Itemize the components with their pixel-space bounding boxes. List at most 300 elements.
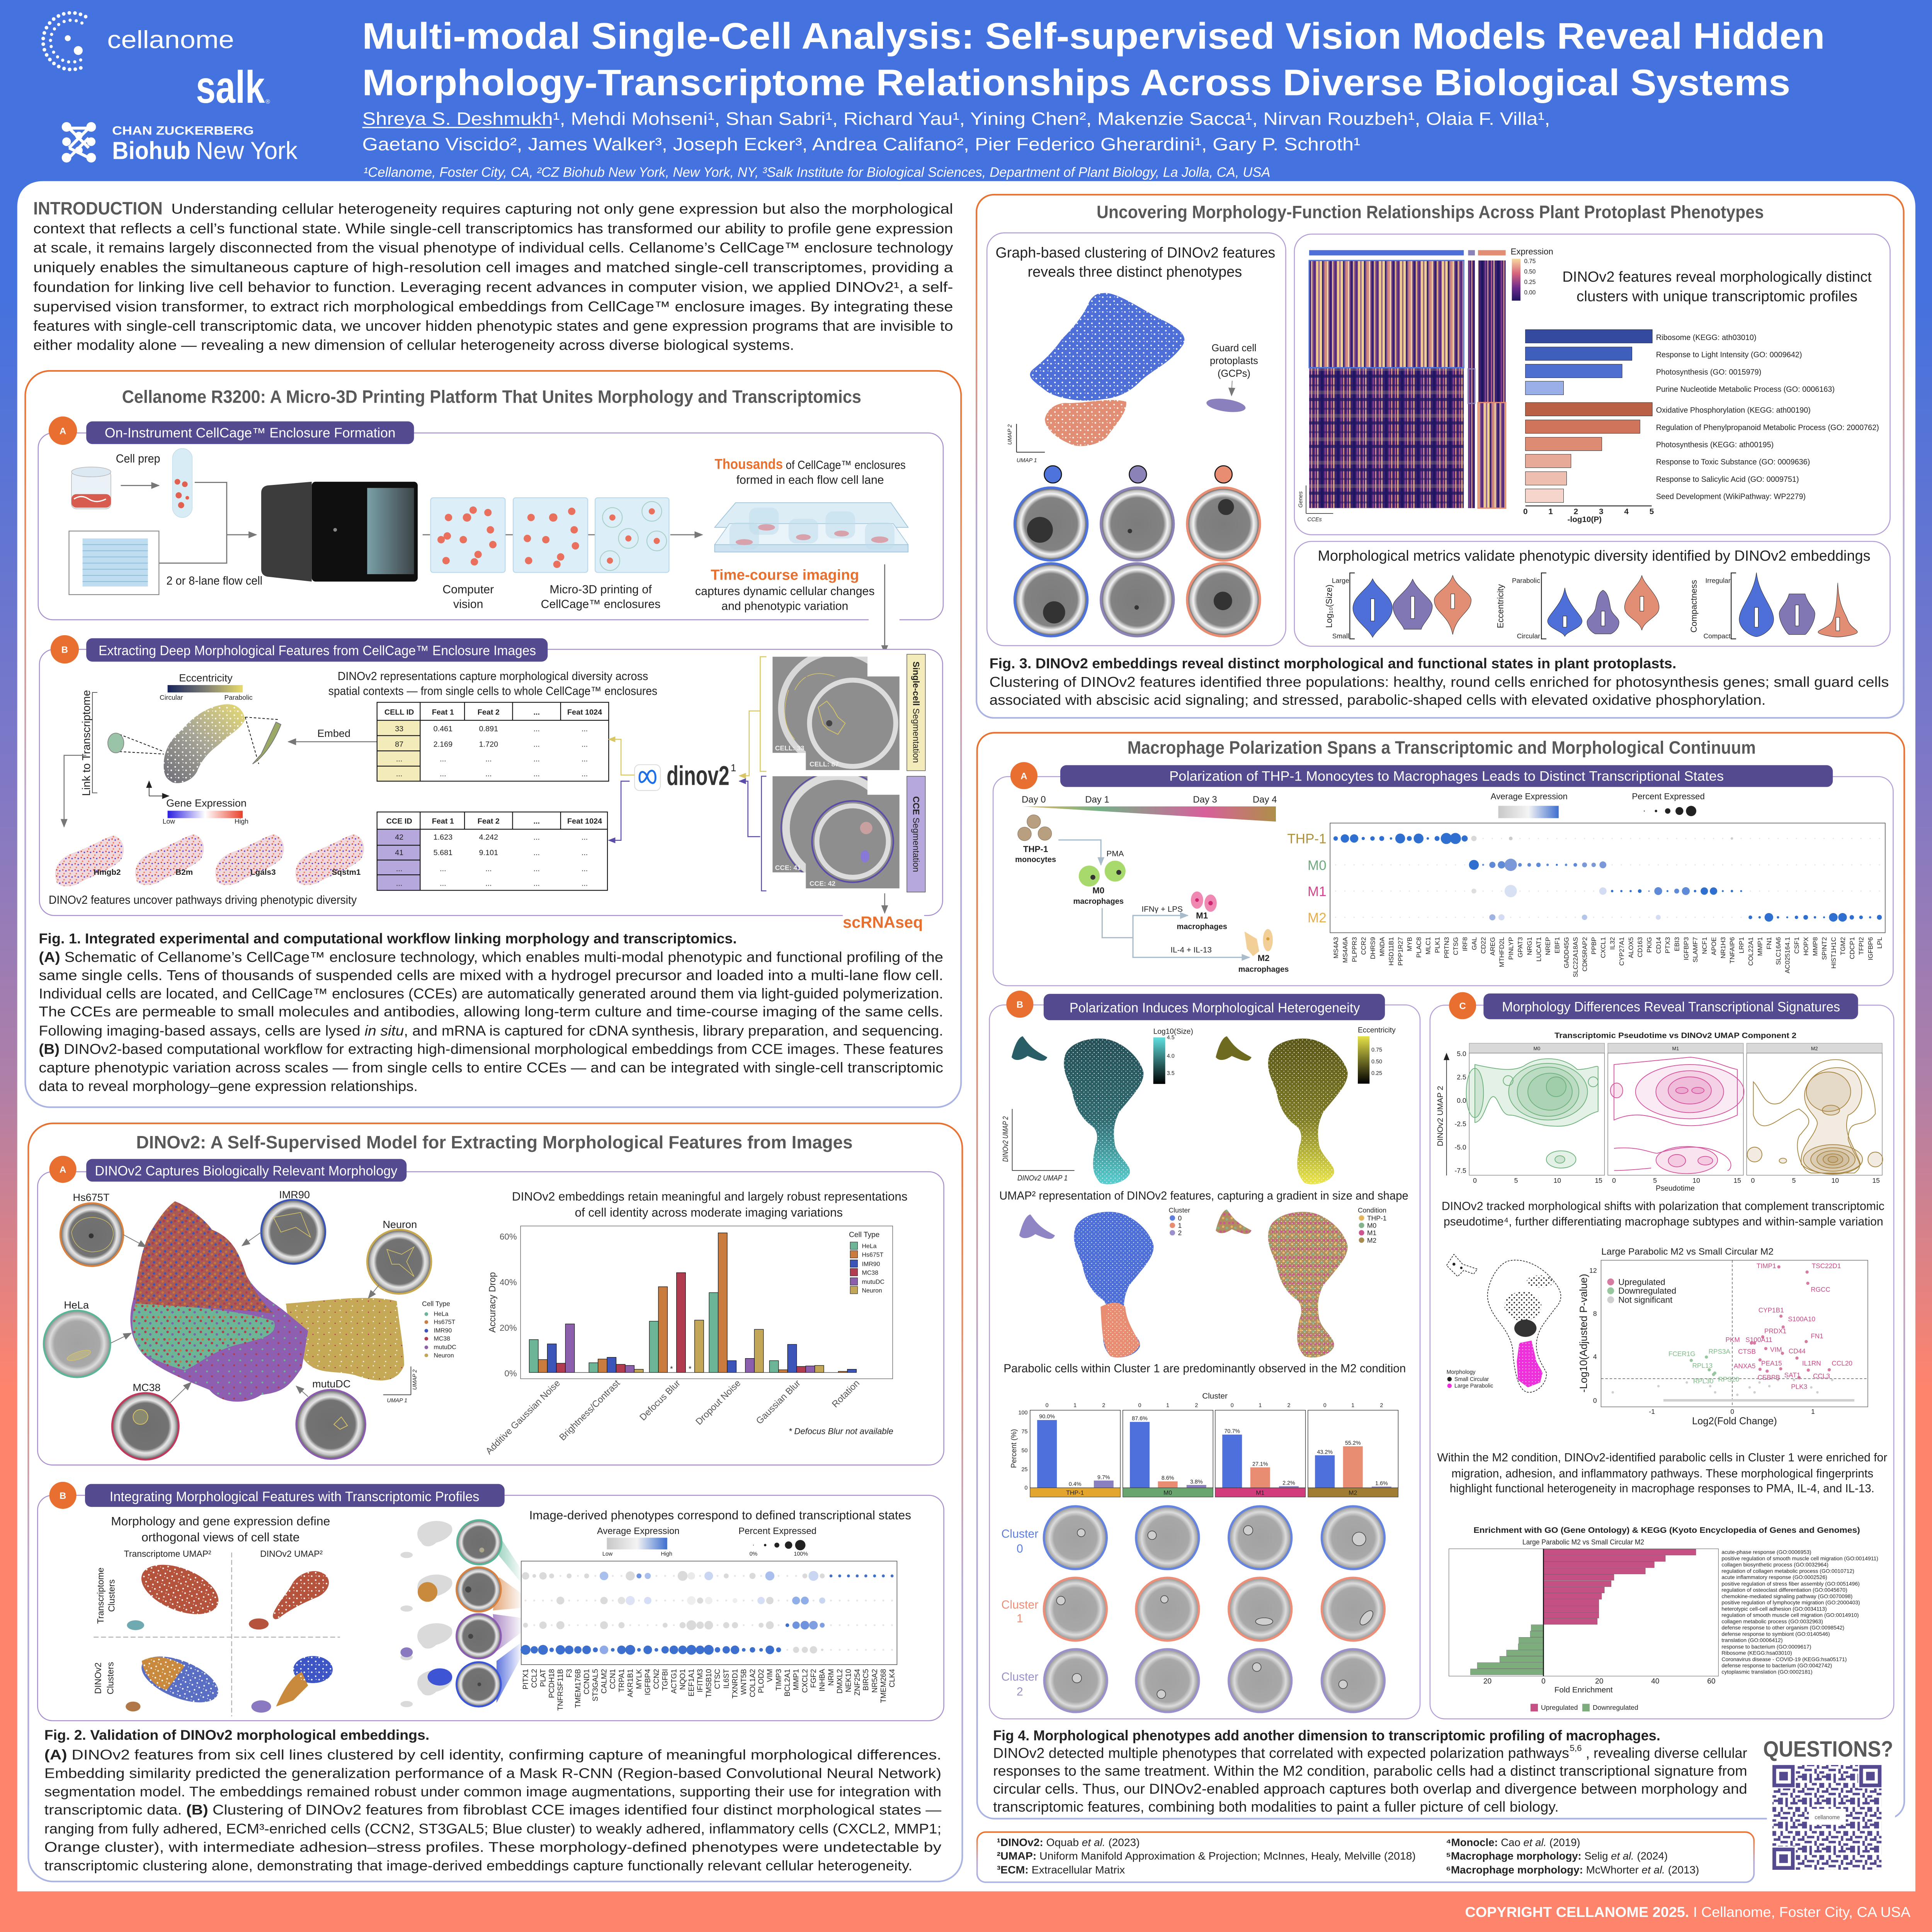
volcano plot: TIMP1 <box>1757 1262 1776 1270</box>
bar chart: enrichment: 3 <box>1599 507 1604 516</box>
density chart: pseudotime: M1 <box>1672 1046 1679 1051</box>
heading: bar chart <box>512 1189 908 1219</box>
annotation bars <box>1309 250 1506 255</box>
dot plot: polarization genes: HSD11B1 <box>1388 937 1395 966</box>
violins: eccentricity: Circular <box>1517 632 1540 640</box>
dot plot: fibroblast genes <box>520 1561 897 1711</box>
volcano plot: Not significant <box>1618 1295 1673 1304</box>
volcano plot: S100A10 <box>1788 1315 1815 1323</box>
dot plot: polarization genes: AC025164.1 <box>1784 937 1791 973</box>
volcano plot: 4 <box>1593 1353 1597 1361</box>
text: thousands <box>714 456 906 486</box>
bar chart: enrichment: Photosynthesis (GO: 0015979) <box>1656 367 1761 376</box>
dot plot: polarization genes: MS4A6A <box>1342 937 1349 963</box>
subpanel: heatmap and enrichment <box>1294 234 1890 535</box>
connectors: dinov2 <box>609 657 766 891</box>
density chart: pseudotime: M2 <box>1811 1046 1818 1051</box>
badge C <box>1449 992 1476 1019</box>
icon: tube <box>172 449 192 517</box>
table: cell features: 87 <box>395 740 403 748</box>
bar chart: enrichment: -log10(P) <box>1567 515 1602 524</box>
title: Morphology-Transcriptome Relationships Across Diverse Biological Systems <box>362 62 1790 103</box>
dot plot: polarization genes: APOE <box>1710 937 1718 955</box>
logo: Chan Zuckerberg Biohub: CHAN ZUCKERBERG <box>112 124 254 138</box>
table: cell features: ... <box>440 770 446 778</box>
arrows: prep to instrument <box>121 482 885 653</box>
legend: expression: 0.00 <box>1524 289 1536 296</box>
volcano plot: FN1 <box>1811 1332 1823 1340</box>
density chart: pseudotime: 5 <box>1792 1177 1796 1184</box>
volcano plot: VIM <box>1770 1346 1782 1354</box>
legend: cluster <box>1169 1206 1190 1237</box>
caption: Fig 3: Clustering of DINOv2 features identified three populations: healthy, round cells enriched for photosynthesis genes; small guard cells <box>990 674 1889 690</box>
density chart: pseudotime: 15 <box>1872 1177 1880 1184</box>
text: treatments <box>1107 849 1212 954</box>
text: pseudotime: DINOv2 tracked morphological shifts with polarization that complement transcriptomic <box>1442 1200 1884 1213</box>
badge B <box>1006 991 1033 1018</box>
caption: Fig 2: Orange cluster), with intermediate adhesion–stress profiles. These morphology-defined phenotypes were undetectable by <box>44 1840 941 1855</box>
dot plot: fibroblast genes: VIM <box>766 1669 774 1682</box>
bar chart: accuracy drop: Accuracy Drop <box>487 1272 498 1333</box>
table: CCE features: ... <box>440 864 446 873</box>
introduction text: INTRODUCTION <box>33 198 163 218</box>
panel: references: ²UMAP: Uniform Manifold Approximation & Projection; McInnes, Healy, Melville (2018) <box>997 1850 1416 1862</box>
dot plot: fibroblast genes: CCL2 <box>531 1669 539 1688</box>
dot plot: polarization genes: THP-1 <box>1287 832 1327 847</box>
violins: compactness: Compact <box>1704 632 1731 640</box>
dot plot: polarization genes: CD22 <box>1480 937 1487 954</box>
chart: enrichment: 20 <box>1483 1677 1492 1685</box>
volcano plot: S100A11 <box>1745 1336 1772 1344</box>
legend: percent expressed: 100% <box>794 1551 808 1557</box>
legend: expression: 0.50 <box>1524 269 1536 275</box>
dot plot: fibroblast genes: FGF2 <box>810 1669 818 1688</box>
violins: compactness: Irregular <box>1705 577 1731 584</box>
images: single-cell segmentation <box>772 652 900 770</box>
legend: average expression <box>1491 792 1568 818</box>
bar chart: accuracy drop: Dropout Noise <box>694 1378 743 1427</box>
introduction text: at scale, it remains largely disconnected from the visual phenotype of individual cells. Cellanome’s CellCage™ enclosure technology <box>33 240 953 256</box>
legend: bar chart: Hs675T <box>862 1252 884 1259</box>
dinov2 logo <box>634 760 736 791</box>
dot plot: polarization genes: NREP <box>1544 937 1551 955</box>
icon: glass flow cell <box>714 503 908 552</box>
UMAP: morphology outline <box>1447 1254 1561 1392</box>
table: CCE features: 9.101 <box>479 849 498 857</box>
subpanel: clustering <box>987 233 1286 646</box>
dot plot: fibroblast genes: NRM <box>827 1669 835 1686</box>
labels: clusters: 0 <box>1017 1543 1023 1555</box>
dot plot: fibroblast genes: TMEM268 <box>879 1669 888 1703</box>
violins: size: Log₁₀(Size) <box>1324 585 1334 628</box>
bar chart: cluster percent <box>1010 1391 1398 1497</box>
image: HeLa: HeLa <box>64 1299 89 1311</box>
violins: eccentricity: Eccentricity <box>1495 584 1505 628</box>
logo: salk: salk <box>196 62 265 113</box>
legend: percent expressed: Percent Expressed <box>738 1526 816 1536</box>
legend: expression: 0.75 <box>1524 258 1536 265</box>
dot plot: fibroblast genes: WNT5B <box>740 1669 748 1695</box>
title: Multi-modal Single-Cell Analysis: Self-supervised Vision Models Reveal Hidden <box>362 15 1825 57</box>
UMAP: eccentricity <box>1216 1036 1348 1184</box>
panel heading: DINOv2: A Self-Supervised Model for Extracting Morphological Features from Images <box>136 1132 853 1152</box>
authors: Shreya S. Deshmukh¹, Mehdi Mohseni¹, Shan Sabri¹, Richard Yau¹, Yining Chen², Makenzie Sacca¹, Nirvan Rouzbeh¹, Olaia F. Villa¹, <box>362 109 1550 129</box>
label: scRNAseq: scRNAseq <box>843 913 923 931</box>
dot plot: fibroblast genes: BCL2A1 <box>784 1669 792 1696</box>
bar chart: enrichment: 1 <box>1548 507 1553 516</box>
volcano plot: CD44 <box>1789 1347 1806 1355</box>
heading: Morphological metrics validate phenotypic diversity identified by DINOv2 embeddings <box>1318 548 1871 564</box>
caption: Fig 1: data to reveal morphology–gene expression relationships. <box>39 1078 418 1094</box>
dot plot: fibroblast genes: TMEM176B <box>574 1669 582 1708</box>
text: treatments: IL-4 + IL-13 <box>1170 946 1212 954</box>
label: single-cell segmentation <box>907 654 925 771</box>
bar chart: accuracy drop: 40% <box>500 1277 517 1287</box>
axes: heatmap: Genes <box>1298 492 1304 508</box>
axes: DINOv2 UMAP 1 <box>1017 1174 1068 1182</box>
subpanel B: morphological heterogeneity <box>990 991 1420 1719</box>
dot plot: polarization genes <box>1287 823 1885 977</box>
badge B: B <box>1017 1000 1023 1010</box>
dot plot: polarization genes: MMP8 <box>1811 937 1819 956</box>
dinov2 logo: 1 <box>731 763 736 774</box>
text: M2 condition: Within the M2 condition, DINOv2-identified parabolic cells in Cluster 1 were enriched for <box>1437 1451 1887 1464</box>
chart: enrichment: translation (GO:0006412) <box>1721 1637 1783 1643</box>
caption: Fig 4 <box>993 1728 1747 1815</box>
text: time-course imaging: and phenotypic variation <box>721 600 848 612</box>
introduction text: features with single-cell transcriptomic data, we uncover hidden phenotypic states and gene expression programs that are invisible to <box>33 318 953 334</box>
chart: enrichment: 0 <box>1541 1677 1546 1685</box>
table: cell features: ... <box>485 755 492 764</box>
table: cell features: 0.461 <box>434 725 452 733</box>
introduction text: Understanding cellular heterogeneity requires capturing not only gene expression but also the morphological <box>171 201 953 217</box>
introduction text: supervised vision transformer, to extract rich morphological embeddings from CellCage™ enclosure images. By integrating these <box>33 298 953 315</box>
chart: enrichment: regulation of osteoclast differentiation (GO:0045670) <box>1721 1587 1847 1593</box>
bar chart: cluster percent: 9.7% <box>1097 1475 1110 1481</box>
bar chart: cluster percent: 87.6% <box>1132 1416 1148 1422</box>
dot plot: polarization genes: M1 <box>1308 884 1327 899</box>
bar chart: cluster percent: 2 <box>1195 1403 1198 1409</box>
dot plot: fibroblast genes: CCND1 <box>583 1669 591 1694</box>
legend: UMAP cell type: Cell Type <box>422 1300 450 1308</box>
subpanel B: morphological heterogeneity: Polarization Induces Morphological Heterogeneity <box>1070 1000 1360 1015</box>
bar chart: cluster percent: 1 <box>1259 1403 1262 1409</box>
dot plot: polarization genes: CD163 <box>1636 937 1644 957</box>
bar chart: enrichment: Purine Nucleotide Metabolic Process (GO: 0006163) <box>1656 385 1835 394</box>
chart: enrichment: positive regulation of stress fiber assembly (GO:0051496) <box>1721 1580 1860 1587</box>
bar chart: cluster percent: THP-1 <box>1066 1490 1084 1497</box>
legend: cluster: 2 <box>1178 1229 1182 1237</box>
volcano plot: RPL30 <box>1693 1377 1713 1385</box>
bar chart: cluster percent: 43.2% <box>1317 1449 1333 1455</box>
caption: Fig 2: ranging from fully adhered, ECM³-enriched cells (CCN2, ST3GAL5; Blue cluster) to weakly adhered, inflammatory cells (CXCL2, MMP1; <box>44 1821 941 1837</box>
dot plot: polarization genes: PINLYP <box>1507 937 1515 960</box>
dot plot: polarization genes: M0 <box>1308 858 1327 873</box>
panel heading: Cellanome R3200: A Micro-3D Printing Platform That Unites Morphology and Transcriptomics <box>122 387 861 407</box>
facet: M2 <box>1747 1060 1883 1174</box>
caption: Fig 1: The CCEs are permeable to small molecules and antibodies, allowing long-term culture and time-course imaging of the same cells. <box>39 1004 943 1020</box>
legend: percent expressed <box>738 1526 816 1557</box>
logo: Chan Zuckerberg Biohub: New York <box>196 136 298 164</box>
image: Hs675T <box>60 1191 123 1266</box>
introduction text <box>33 198 953 353</box>
text: M2 condition <box>1437 1451 1887 1495</box>
caption: Fig 3 <box>990 655 1889 708</box>
timeline <box>1022 794 1277 821</box>
dot plot: polarization genes: GAL <box>1471 937 1478 950</box>
header logos <box>43 13 298 164</box>
chart: enrichment: defense response to symbiont (GO:0140546) <box>1721 1631 1830 1637</box>
legend: size: 3.5 <box>1167 1070 1175 1077</box>
legend: gene expression: Low <box>163 818 175 825</box>
table: cell features: ... <box>533 755 540 764</box>
subpanel C: transcriptional signatures <box>1430 992 1894 1719</box>
violins: size: Large <box>1332 577 1349 584</box>
density chart: pseudotime: 5 <box>1653 1177 1657 1184</box>
caption: Fig 2: Embedding similarity predicted the generalization performance of a Mask R-CNN (Region-based Convolutional Neural Network) <box>44 1765 941 1781</box>
dot plot: fibroblast genes: NQO1 <box>679 1669 687 1690</box>
dot plot: polarization genes: IL32 <box>1609 937 1616 950</box>
QR code: cellanome <box>1815 1815 1840 1821</box>
legend: eccentricity: 0.50 <box>1371 1059 1382 1065</box>
table: cell features: Feat 1024 <box>567 708 602 716</box>
table: CCE features: CCE ID <box>386 817 412 826</box>
image: Neuron <box>367 1218 431 1294</box>
legend: morphology <box>1447 1369 1493 1389</box>
label: CCE segmentation: CCE Segmentation <box>911 796 921 872</box>
bar chart: cluster percent: 2 <box>1287 1403 1290 1409</box>
legend: percent expressed: 0% <box>750 1551 758 1557</box>
labels: clusters <box>1001 1528 1038 1698</box>
images: single-cell segmentation: CELL: 87 <box>810 760 839 768</box>
density chart: pseudotime: 0 <box>1473 1177 1477 1184</box>
dot plot: polarization genes: ALOX5 <box>1627 937 1634 958</box>
caption: Fig 2: transcriptomic data. (B) Clustering of DINOv2 features from fibroblast CCE images identified four distinct morphological states — <box>44 1802 942 1818</box>
caption: Fig 1: (B) DINOv2-based computational workflow for extracting high-dimensional morphological embeddings from CCE images. These features <box>39 1041 943 1057</box>
dot plot: polarization genes: PPP1R27 <box>1397 937 1404 966</box>
dot plot: fibroblast genes: PLAT <box>539 1669 548 1687</box>
dot plot: fibroblast genes: DMXL2 <box>836 1669 844 1694</box>
volcano plot: TSC22D1 <box>1812 1262 1841 1270</box>
legend: UMAP cell type: MC38 <box>434 1335 450 1342</box>
violins: compactness: Compactness <box>1689 580 1699 633</box>
caption: Fig 1: Fig. 1. Integrated experimental and computational workflow linking morphology and transcriptomics. <box>39 931 737 947</box>
table: cell features: 33 <box>395 725 403 733</box>
table: CCE features: ... <box>582 833 588 842</box>
UMAP grid <box>126 1555 333 1713</box>
images: plant cells <box>1015 488 1260 636</box>
density chart: pseudotime: 0 <box>1612 1177 1616 1184</box>
heading: bar chart: of cell identity across moderate imaging variations <box>575 1206 843 1219</box>
arrow: embed: Embed <box>317 727 350 739</box>
labels: UMAP grid: DINOv2 <box>93 1662 103 1694</box>
caption: Fig 4: Fig 4. Morphological phenotypes add another dimension to transcriptomic profiling of macrophages. <box>993 1728 1660 1743</box>
dot plot: fibroblast genes: MMP1 <box>793 1669 801 1690</box>
arrow: to scRNAseq <box>884 893 885 913</box>
subpanel B: deep features: Extracting Deep Morphological Features from CellCage™ Enclosure Images <box>99 643 536 658</box>
bar chart: accuracy drop: 0% <box>504 1369 517 1378</box>
chart: enrichment: Fold Enrichment <box>1554 1685 1613 1694</box>
dot plot: polarization genes: CYP27A1 <box>1618 937 1625 966</box>
panel heading: Uncovering Morphology-Function Relationships Across Plant Protoplast Phenotypes <box>1097 202 1764 222</box>
dot plot: fibroblast genes: CTSC <box>714 1669 722 1689</box>
caption: Fig 1: (A) Schematic of Cellanome’s CellCage™ enclosure technology, which enables multi-modal phenotypic and functional profiling of the <box>39 949 943 965</box>
legend dots <box>1044 466 1232 483</box>
text: pseudotime <box>1442 1200 1884 1228</box>
UMAPs: gene expression: Lgals3 <box>250 868 276 877</box>
axes <box>1007 424 1045 464</box>
bar chart: accuracy drop: 20% <box>500 1323 517 1333</box>
volcano plot: Downregulated <box>1618 1286 1676 1296</box>
image panels: cells <box>430 498 669 573</box>
legend: average expression: High <box>661 1551 672 1557</box>
dot plot: fibroblast genes: NR5A2 <box>871 1669 879 1693</box>
table: CCE features: Feat 2 <box>478 817 500 826</box>
UMAP: condition <box>1216 1209 1348 1357</box>
mini UMAPs <box>400 1521 452 1707</box>
bar chart: cluster percent: 90.0% <box>1039 1413 1055 1420</box>
density chart: pseudotime: 10 <box>1554 1177 1561 1184</box>
callouts: cell zoom <box>108 717 281 764</box>
bar chart: cluster percent: 0 <box>1046 1403 1049 1409</box>
label: guard cells: (GCPs) <box>1218 368 1250 379</box>
badge B <box>51 635 79 663</box>
caption: Fig 4: responses to the same treatment. Within the M2 condition, parabolic cells had a distinct transcriptional signature from <box>993 1763 1747 1779</box>
caption: Fig 1: capture phenotypic variation across scales — from single cells to entire CCEs — and can be integrated with single-cell transcriptomic <box>39 1060 943 1076</box>
table: CCE features: ... <box>396 879 402 888</box>
image: IMR90: IMR90 <box>279 1189 310 1201</box>
dot plot: polarization genes: EBI3 <box>1673 937 1681 951</box>
volcano plot: -1 <box>1649 1408 1655 1415</box>
subpanel B: integrating features: Integrating Morphological Features with Transcriptomic Profiles <box>110 1489 479 1504</box>
bar chart: enrichment: Oxidative Phosphorylation (KEGG: ath00190) <box>1656 406 1811 415</box>
facet: M0 <box>1466 1059 1598 1168</box>
caption: Fig 1: Following imaging-based assays, cells are lysed in situ , and mRNA is captured for cDNA synthesis, library preparation, and sequencing. <box>39 1023 943 1039</box>
legend: size: Log10(Size) <box>1153 1027 1193 1036</box>
bar chart: cluster percent: 1 <box>1166 1403 1169 1409</box>
cells: M2: macrophages <box>1238 965 1289 974</box>
legend: cluster: Cluster <box>1169 1206 1190 1214</box>
instrument <box>261 482 418 582</box>
dot plot: polarization genes: AREG <box>1489 937 1497 956</box>
legend: gene expression <box>163 797 248 825</box>
subpanel A: enclosure formation: On-Instrument CellCage™ Enclosure Formation <box>105 425 396 440</box>
table: cell features: ... <box>533 708 540 716</box>
legend: eccentricity: Eccentricity <box>1358 1026 1396 1034</box>
labels: UMAP grid: DINOv2 UMAP² <box>260 1549 323 1559</box>
table: CCE features: 5.681 <box>434 849 452 857</box>
heading: DINOv2 features reveal morphologically distinct <box>1562 269 1872 285</box>
text: link to transcriptome: Link to Transcriptome <box>80 690 93 796</box>
bar chart: enrichment: Seed Development (WikiPathway: WP2279) <box>1656 492 1806 501</box>
dot plot: polarization genes: MTHFD2L <box>1498 937 1505 967</box>
cells: M2: M2 <box>1258 953 1270 963</box>
text: micro-3D printing: Micro-3D printing of <box>549 583 652 596</box>
legend: bar chart: HeLa <box>862 1243 877 1250</box>
dot plot: polarization genes: PRTN3 <box>1443 937 1450 958</box>
text: time-course imaging: captures dynamic cellular changes <box>695 585 875 598</box>
table: cell features: ... <box>582 770 588 778</box>
volcano plot: FCER1G <box>1668 1350 1696 1358</box>
dot plot: fibroblast genes: ST3GAL5 <box>592 1669 600 1701</box>
affiliations: ¹Cellanome, Foster City, CA, ²CZ Biohub New York, New York, NY, ³Salk Institute for Biological Sciences, Department of Plant Biology, La Jolla, CA, USA <box>364 165 1270 180</box>
heading: clusters with unique transcriptomic profiles <box>1577 288 1857 305</box>
dot plot: polarization genes: CXCL1 <box>1600 937 1607 958</box>
chart: enrichment: regulation of smooth muscle cell migration (GO:0014910) <box>1721 1612 1859 1618</box>
text: M2 condition: highlight functional heterogeneity in macrophage responses to PMA, IL-4, and IL-13. <box>1450 1482 1874 1495</box>
chart: enrichment <box>1449 1525 1878 1711</box>
dot plot: polarization genes: TFPI2 <box>1858 937 1865 955</box>
dot plot: polarization genes: EBF1 <box>1553 937 1561 953</box>
legend: average expression <box>597 1526 680 1557</box>
legend: size <box>1153 1027 1193 1084</box>
legend: morphology: Small Circular <box>1454 1376 1489 1383</box>
dot plot: fibroblast genes: AKR1B1 <box>626 1669 634 1697</box>
badge B <box>49 1482 77 1509</box>
cells: M1 <box>1177 891 1227 931</box>
text: representations <box>328 670 657 697</box>
dot plot: polarization genes: SLC22A18AS <box>1572 937 1579 977</box>
UMAP: plant clusters <box>1030 293 1247 446</box>
volcano plot: PRDX1 <box>1764 1327 1786 1335</box>
legend: morphology: Morphology <box>1447 1369 1476 1375</box>
violins: size <box>1324 573 1471 640</box>
volcano plot: CCL20 <box>1832 1359 1852 1367</box>
text: treatments: IFNγ + LPS <box>1141 905 1183 914</box>
dot plot: polarization genes: SLC16A6 <box>1775 937 1782 965</box>
legend: expression <box>1510 247 1553 301</box>
table: CCE features <box>377 812 607 890</box>
cells: M1: M1 <box>1196 911 1208 920</box>
text: computer vision: vision <box>453 598 483 611</box>
QR code <box>1772 1765 1881 1870</box>
text: micro-3D printing: CellCage™ enclosures <box>541 598 660 611</box>
bar chart: accuracy drop: Gaussian Blur <box>754 1378 803 1426</box>
legend: bar chart: IMR90 <box>862 1261 880 1267</box>
dot plot: fibroblast genes: TRPA1 <box>618 1669 626 1692</box>
chart: enrichment: acute-phase response (GO:0006953) <box>1721 1549 1811 1555</box>
legend: average expression: Low <box>602 1551 613 1557</box>
image: mutuDC: mutuDC <box>312 1378 350 1390</box>
images: macrophage clusters <box>1044 1506 1384 1712</box>
cells: THP-1 <box>1015 815 1056 864</box>
labels: UMAP grid: Clusters <box>107 1579 117 1612</box>
dot plot: fibroblast genes: TNFRSF11B <box>557 1669 565 1711</box>
legend: cluster: 0 <box>1178 1214 1182 1222</box>
dot plot: polarization genes: TGM2 <box>1839 937 1847 955</box>
bar chart: enrichment: Photosynthesis (KEGG: ath00195) <box>1656 440 1774 449</box>
dot plot: polarization genes: PKIG <box>1646 937 1653 952</box>
axes: heatmap: CCEs <box>1307 517 1322 523</box>
dot plot: fibroblast genes: TIMP3 <box>775 1669 783 1691</box>
volcano plot: RPS20 <box>1718 1375 1739 1383</box>
bar chart: cluster percent: 0 <box>1323 1403 1327 1409</box>
timeline: Day 0 <box>1022 794 1046 805</box>
images: single-cell segmentation: CELL: 33 <box>775 744 804 752</box>
chart: enrichment: 60 <box>1707 1677 1716 1685</box>
dot plot: fibroblast genes: F3 <box>565 1669 573 1678</box>
legend: bar chart: mutuDC <box>862 1279 884 1286</box>
legend: average expression: Average Expression <box>597 1526 680 1536</box>
UMAPs: gene expression: Sqstm1 <box>332 868 361 877</box>
legend: eccentricity <box>1358 1026 1396 1084</box>
bar chart: cluster percent: 2 <box>1102 1403 1105 1409</box>
labels: clusters: Cluster <box>1001 1599 1038 1611</box>
caption: Fig 3: associated with abscisic acid signaling; and stressed, parabolic-shaped cells with elevated oxidative phosphorylation. <box>990 692 1766 708</box>
dot plot: polarization genes: HOPX <box>1803 937 1810 956</box>
labels: UMAP grid: Transcriptome <box>95 1568 105 1624</box>
cells: M1: macrophages <box>1177 922 1227 931</box>
